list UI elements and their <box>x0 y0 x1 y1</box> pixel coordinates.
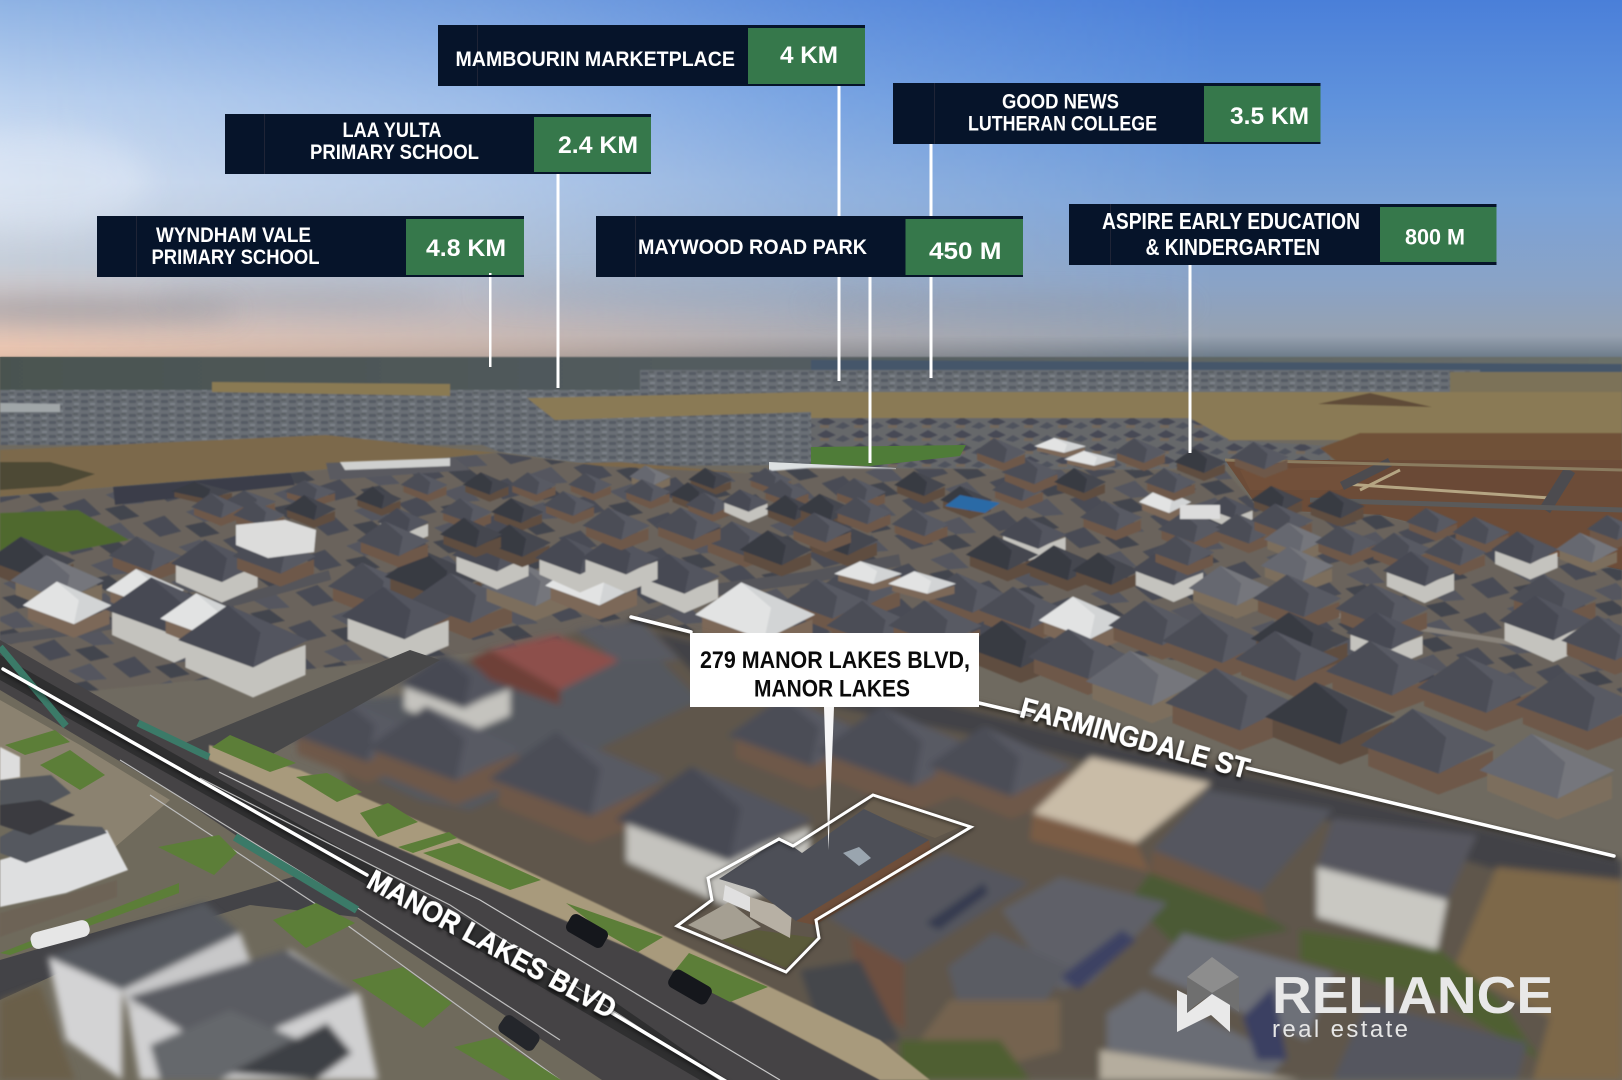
label: Aspire Early Education and Kindergarten: ASPIRE EARLY EDUCATION <box>1102 208 1360 234</box>
label: Laa Yulta Primary School: PRIMARY SCHOOL <box>310 141 479 164</box>
blurred white townhouses <box>0 902 378 1080</box>
logo icon <box>1177 957 1239 1032</box>
label: Good News Lutheran College <box>893 83 1320 144</box>
street label: Manor Lakes Blvd: MANOR LAKES BLVD <box>362 864 621 1025</box>
Manor Lakes Blvd road and kerbside lots <box>0 640 930 1080</box>
distant suburbs and fields <box>0 357 1622 497</box>
subject house <box>688 796 967 968</box>
label: Good News Lutheran College: LUTHERAN COLLEGE <box>968 112 1157 136</box>
address callout <box>690 633 979 707</box>
label: Mambourin Marketplace: MAMBOURIN MARKETPLACE <box>456 48 735 71</box>
logo: Reliance Real Estate <box>1177 957 1553 1043</box>
leader line: Good News Lutheran College <box>930 144 932 378</box>
leader line: Mambourin Marketplace <box>838 86 840 381</box>
label: Good News Lutheran College: GOOD NEWS <box>1002 90 1119 114</box>
new land plots <box>1225 460 1622 570</box>
leader line: Wyndham Vale Primary School <box>489 273 492 367</box>
label: Wyndham Vale Primary School: WYNDHAM VALE <box>156 224 311 247</box>
label: Maywood Road Park <box>596 216 1023 277</box>
label: Mambourin Marketplace <box>438 25 865 86</box>
road outlines <box>3 617 1614 1080</box>
logo: Reliance Real Estate: RELIANCE <box>1272 967 1553 1025</box>
leader line: Maywood Road Park <box>868 277 872 463</box>
leader line: Aspire Early Education <box>1188 265 1192 453</box>
label: Maywood Road Park: MAYWOOD ROAD PARK <box>638 236 867 259</box>
ground base <box>0 357 1622 1080</box>
address callout: MANOR LAKES <box>754 676 910 702</box>
label: Aspire Early Education and Kindergarten <box>1069 204 1496 265</box>
address callout: 279 MANOR LAKES BLVD, <box>700 647 970 674</box>
label: Aspire Early Education and Kindergarten: 800 M <box>1405 224 1465 250</box>
left foreground white houses <box>0 747 128 937</box>
leader line: Laa Yulta Primary School <box>556 174 560 388</box>
label: Laa Yulta Primary School <box>225 114 651 174</box>
label: Laa Yulta Primary School: LAA YULTA <box>342 119 442 142</box>
parked cars <box>29 912 714 1053</box>
property boundary outline <box>677 795 971 972</box>
label: Mambourin Marketplace: 4 KM <box>780 42 838 69</box>
logo: Reliance Real Estate: real estate <box>1272 1016 1408 1043</box>
label: Maywood Road Park: 450 M <box>929 238 1002 265</box>
roadside lawns <box>0 730 768 1080</box>
street label: Farmingdale St: FARMINGDALE ST <box>1017 692 1253 786</box>
sky <box>0 0 1622 365</box>
foreground blurred houses <box>275 618 1622 1080</box>
mid-ground neighbourhood rows <box>0 438 1622 820</box>
pointer to property <box>824 707 834 850</box>
label: Wyndham Vale Primary School: 4.8 KM <box>426 235 506 262</box>
park and white building <box>769 445 966 482</box>
label: Laa Yulta Primary School: 2.4 KM <box>558 132 638 159</box>
label: Wyndham Vale Primary School: PRIMARY SCHOOL <box>152 246 320 269</box>
label: Good News Lutheran College: 3.5 KM <box>1230 103 1309 130</box>
label: Aspire Early Education and Kindergarten: & KINDERGARTEN <box>1146 234 1320 260</box>
label: Wyndham Vale Primary School <box>97 216 524 277</box>
